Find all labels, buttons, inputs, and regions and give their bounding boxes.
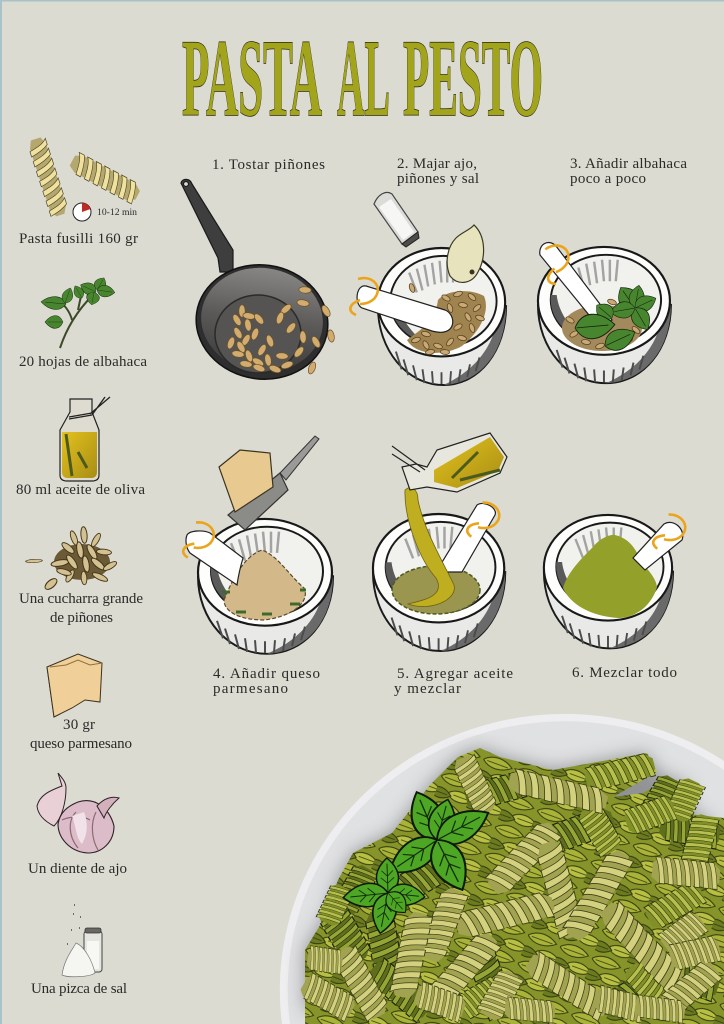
crushed nuts bbox=[562, 298, 642, 351]
heading: step 1: 1. Tostar piñones bbox=[212, 157, 325, 173]
text: cheese quantity bbox=[30, 717, 132, 752]
icon: pouring oil bottle bbox=[392, 433, 507, 492]
icon: mortar bbox=[198, 519, 333, 654]
mid-green fusilli layer bbox=[316, 752, 719, 1022]
icon: garlic bbox=[37, 773, 119, 853]
panel: step 3 add basil bbox=[538, 156, 687, 383]
herbs and nuts in pile bbox=[222, 590, 306, 614]
heading: step 6: 6. Mezclar todo bbox=[572, 665, 677, 681]
heading: step 3: 3. Añadir albahaca bbox=[570, 156, 687, 172]
icon: timer bbox=[73, 203, 91, 221]
icon: pestle bbox=[633, 512, 688, 570]
icon: parmesan block bbox=[219, 450, 273, 512]
bowl rim bbox=[280, 714, 724, 1024]
pesto bbox=[563, 535, 657, 618]
icon: grater bbox=[228, 436, 319, 530]
icon: pestle bbox=[538, 242, 612, 326]
icon: salt shaker bbox=[374, 192, 419, 247]
pine nuts in pan bbox=[226, 286, 335, 375]
icon: mortar bbox=[538, 247, 671, 383]
crushed nuts bbox=[407, 283, 486, 355]
icon: pine nuts bbox=[26, 527, 118, 591]
text: pine nut quantity: Una cucharra grande bbox=[19, 591, 143, 607]
title: AL bbox=[337, 17, 390, 139]
icon: pestle bbox=[436, 500, 502, 572]
pesto mixture bbox=[392, 566, 480, 614]
panel: step 6 mix everything bbox=[544, 512, 688, 681]
basil garnish large bbox=[382, 786, 495, 897]
heading: step 2: piñones y sal bbox=[397, 171, 479, 187]
heading: step 5: y mezclar bbox=[394, 681, 461, 697]
panel: step 2 crush garlic, nuts and salt bbox=[350, 156, 506, 385]
text: salt quantity: Una pizca de sal bbox=[31, 981, 127, 997]
bowl interior bbox=[288, 721, 724, 1024]
dark fusilli layer bbox=[317, 768, 722, 1023]
text: oil quantity: 80 ml aceite de oliva bbox=[16, 482, 145, 498]
heading: step 5: 5. Agregar aceite bbox=[397, 666, 513, 682]
heading: step 4: parmesano bbox=[213, 681, 288, 697]
icon: mortar bbox=[373, 514, 505, 651]
text: cheese quantity: 30 gr bbox=[63, 717, 95, 733]
heading: step 4 bbox=[213, 666, 320, 697]
oil stream bbox=[405, 488, 454, 607]
panel: step 1 toast pine nuts bbox=[181, 157, 335, 388]
panel: step 5 add oil bbox=[373, 433, 513, 697]
pasta mass bbox=[305, 748, 724, 1024]
icon: frying pan bbox=[181, 179, 335, 388]
panel: step 4 add parmesan bbox=[182, 436, 333, 697]
bowl shadow bbox=[305, 748, 710, 1010]
icon: garlic clove bbox=[447, 225, 484, 282]
panel: ingredients column bbox=[16, 136, 147, 997]
heading: step 3 bbox=[570, 156, 687, 187]
heading: step 3: poco a poco bbox=[570, 171, 646, 187]
text: pasta quantity: Pasta fusilli 160 gr bbox=[19, 231, 138, 247]
icon: olive oil bottle bbox=[60, 397, 110, 481]
heading: step 5 bbox=[394, 666, 513, 697]
text: pine nut quantity: de piñones bbox=[50, 610, 113, 626]
heading: step 2: 2. Majar ajo, bbox=[397, 156, 477, 172]
basil garnish small bbox=[342, 858, 426, 935]
title: PASTA bbox=[182, 17, 322, 139]
icon: mortar bbox=[544, 515, 673, 648]
icon: parmesan wedge bbox=[47, 654, 102, 717]
text: basil quantity: 20 hojas de albahaca bbox=[19, 354, 147, 370]
basil leaves bbox=[574, 282, 659, 355]
heading: step 4: 4. Añadir queso bbox=[213, 666, 320, 682]
text: pine nut quantity bbox=[19, 591, 143, 626]
heading: step 2 bbox=[397, 156, 479, 187]
icon: salt pile and shaker bbox=[62, 905, 102, 977]
text: timer duration: 10-12 min bbox=[97, 208, 137, 218]
text: garlic quantity: Un diente de ajo bbox=[28, 861, 127, 877]
text: cheese quantity: queso parmesano bbox=[30, 736, 132, 752]
cheese pile bbox=[224, 550, 305, 620]
panel: bowl of pasta al pesto bbox=[280, 714, 724, 1024]
icon: pestle bbox=[350, 278, 453, 332]
icon: basil sprig bbox=[41, 275, 116, 348]
icon: fusilli pasta bbox=[27, 136, 143, 218]
icon: pestle bbox=[182, 520, 243, 585]
light fusilli layer bbox=[298, 753, 723, 1023]
icon: mortar bbox=[378, 248, 506, 385]
